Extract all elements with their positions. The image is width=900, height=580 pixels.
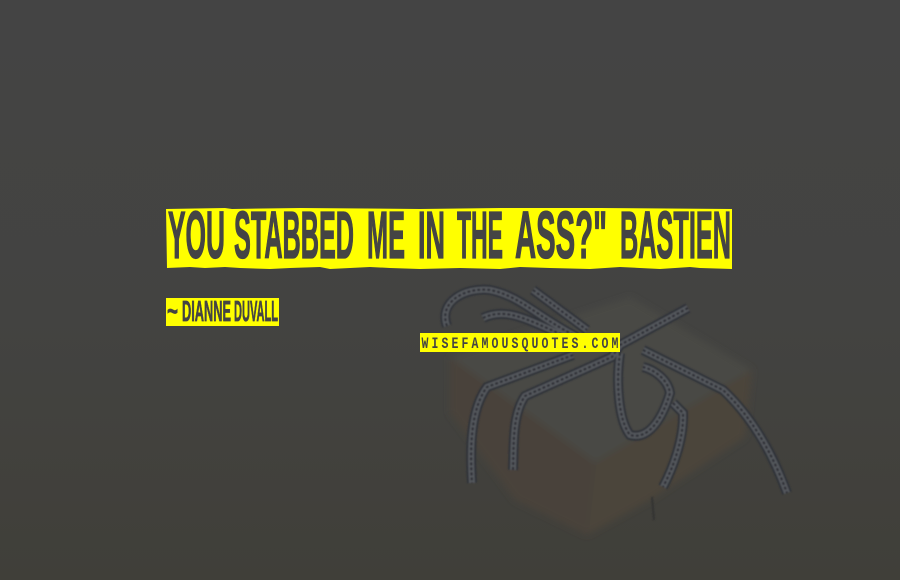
gift box <box>450 297 752 535</box>
watermark text: WISEFAMOUSQUOTES.COM <box>422 335 622 354</box>
quote text: IN <box>418 198 445 273</box>
quote line <box>166 198 732 273</box>
quote graphic: DUVALL <box>234 296 278 328</box>
quote text <box>168 198 731 273</box>
watermark <box>420 333 622 354</box>
author line <box>166 296 279 328</box>
quote text: ASS?" <box>515 198 607 273</box>
photo: gift box with ribbon <box>445 290 787 535</box>
yellow torn strip <box>166 208 732 269</box>
ribbon <box>445 290 787 520</box>
author text: ~ <box>167 296 178 328</box>
quote text: YOU <box>168 198 225 273</box>
quote text: THE <box>457 198 503 273</box>
quote text: ME <box>367 198 405 273</box>
watermark strip <box>420 333 620 352</box>
author strip <box>166 298 279 326</box>
author text: DIANNE <box>182 296 231 328</box>
quote text: STABBED <box>234 198 354 273</box>
